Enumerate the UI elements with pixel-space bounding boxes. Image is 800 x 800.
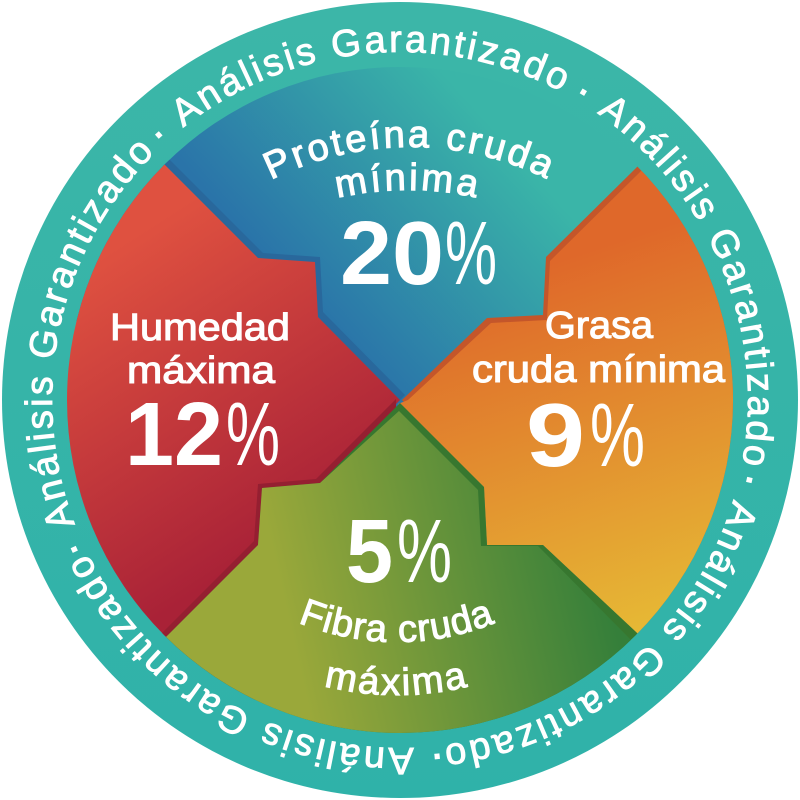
- block: fibre label: %: [397, 502, 452, 602]
- wedge: humidity: [67, 164, 400, 636]
- block: fat label: %: [590, 386, 645, 486]
- block: fat label: cruda mínima: [472, 349, 726, 391]
- block: protein label: Proteína cruda: [262, 120, 551, 180]
- block: protein label: %: [445, 204, 497, 304]
- circular ring text: ·: [746, 476, 753, 484]
- circular ring text: Análisis Garantizado: [176, 29, 567, 128]
- block: humidity label: Humedad: [110, 307, 290, 349]
- block: protein label: mínima: [336, 162, 477, 198]
- block: fibre label: 5: [346, 502, 393, 602]
- block: humidity label: %: [226, 385, 280, 485]
- block: fat label: Grasa: [545, 305, 654, 347]
- circular ring text: Análisis Garantizado: [446, 498, 756, 768]
- wedge: fat: [398, 170, 733, 634]
- block: fat label: 9: [526, 386, 585, 486]
- block: fibre label: Fibra cruda: [300, 598, 496, 643]
- block: protein label: [262, 120, 551, 304]
- block: protein label: 20: [340, 204, 444, 304]
- block: fibre label: máxima: [326, 665, 468, 696]
- circular ring text: ·: [70, 546, 78, 553]
- block: humidity label: [110, 307, 290, 485]
- block: humidity label: máxima: [127, 350, 276, 392]
- wedge shadow: fibre right edge: [166, 403, 638, 733]
- wedge: fibre: [166, 411, 631, 733]
- pie wedges: [67, 68, 733, 733]
- circular ring text: Análisis Garantizado: [72, 557, 414, 775]
- block: fibre label: [300, 502, 496, 696]
- circular ring text: ·: [434, 753, 440, 760]
- block: humidity label: 12: [125, 385, 223, 485]
- circular ring text: Análisis Garantizado: [24, 142, 151, 525]
- wedge: fat shadow edge: [402, 166, 733, 634]
- block: fat label: [472, 305, 726, 486]
- circular ring text: ·: [155, 131, 162, 139]
- wedge shadow: protein edge: [76, 160, 404, 400]
- circular ring text: Análisis Garantizado: [596, 98, 774, 465]
- wedge: protein: [162, 68, 556, 407]
- circular ring text: ·: [580, 88, 587, 96]
- wedge shadow: fibre left edge: [162, 399, 396, 700]
